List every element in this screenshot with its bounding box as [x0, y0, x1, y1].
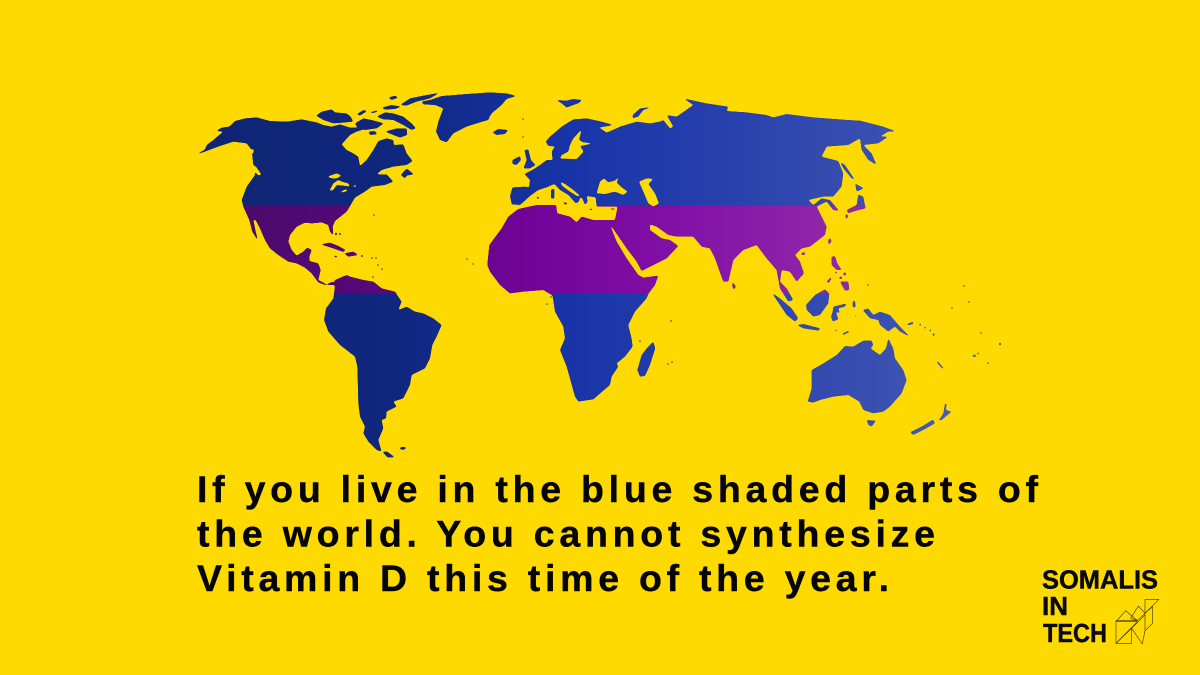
logo: Somalis in Tech: SOMALIS — [1042, 566, 1158, 594]
headline text — [197, 468, 1038, 599]
logo: Somalis in Tech — [1042, 566, 1159, 648]
icon: tangram figure — [1116, 599, 1159, 644]
logo: Somalis in Tech: TECH — [1043, 620, 1107, 648]
world map — [190, 85, 1020, 465]
map land: blue shaded regions — [190, 85, 1020, 465]
logo: Somalis in Tech: IN — [1042, 593, 1068, 621]
headline text: the world. You cannot synthesize — [197, 512, 935, 554]
tiny islands — [335, 118, 1001, 365]
headline text: Vitamin D this time of the year. — [197, 557, 889, 599]
map land: purple equatorial band — [243, 206, 866, 294]
headline text: If you live in the blue shaded parts of — [197, 468, 1038, 510]
